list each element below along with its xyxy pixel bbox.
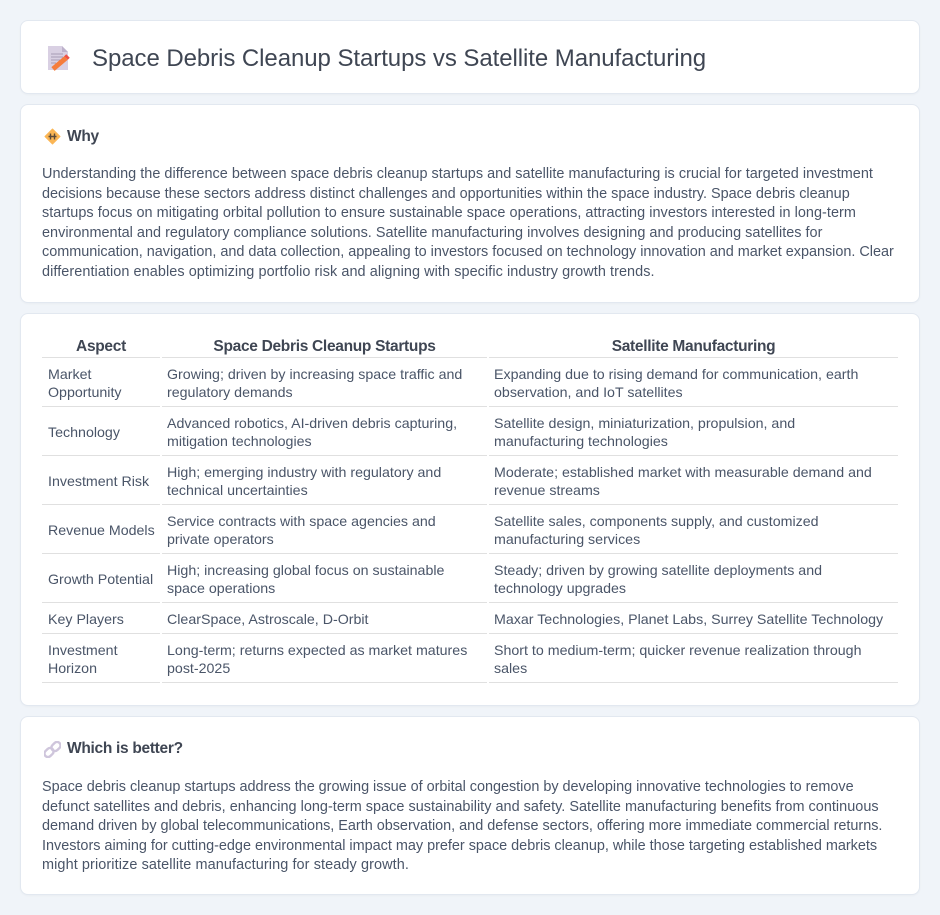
comparison table: Opportunity xyxy=(48,385,122,401)
comparison table: observation, and IoT satellites xyxy=(494,385,683,401)
comparison table: Short to medium-term; quicker revenue realization through xyxy=(494,643,862,659)
comparison table: Growing; driven by increasing space traffic and xyxy=(167,367,462,383)
text block: which is better: demand driven by global telecommunications, Earth observation, and defense sectors, offering more immediate commercial returns. xyxy=(42,818,882,834)
heading: why: Why xyxy=(67,128,99,145)
comparison table xyxy=(42,338,898,683)
comparison table: Expanding due to rising demand for communication, earth xyxy=(494,367,858,383)
comparison table: High; increasing global focus on sustainable xyxy=(167,563,444,579)
comparison table: Horizon xyxy=(48,661,97,677)
comparison table: sales xyxy=(494,661,527,677)
panel: title header xyxy=(20,20,920,94)
comparison table: Technology xyxy=(48,425,120,441)
comparison table: Long-term; returns expected as market matures xyxy=(167,643,467,659)
comparison table: Satellite design, miniaturization, propulsion, and xyxy=(494,416,795,432)
icon: link xyxy=(44,741,61,758)
comparison table: Market xyxy=(48,367,91,383)
title: Space Debris Cleanup Startups vs Satellite Manufacturing xyxy=(92,45,706,72)
comparison table: Investment xyxy=(48,643,118,659)
text block: which is better: Investors aiming for cutting-edge environmental impact may prefer space debris cleanup, while those targeting established markets xyxy=(42,838,877,854)
text block: which is better: defunct satellites and debris, enhancing long-term space sustainability and safety. Satellite manufacturing benefits from continuous xyxy=(42,799,879,815)
text block: why: decisions because these sectors address distinct challenges and opportunities within the space industry. Space debris cleanup xyxy=(42,186,850,202)
text block: why: Understanding the difference between space debris cleanup startups and satellite manufacturing is crucial for targeted investment xyxy=(42,166,873,182)
comparison table: Service contracts with space agencies and xyxy=(167,514,436,530)
text block: which is better: might prioritize satellite manufacturing for steady growth. xyxy=(42,857,409,873)
comparison table: Growth Potential xyxy=(48,572,153,588)
comparison table: manufacturing technologies xyxy=(494,434,668,450)
comparison table: space operations xyxy=(167,581,275,597)
comparison table: regulatory demands xyxy=(167,385,293,401)
icon: document with pencil xyxy=(48,46,70,71)
comparison table: ClearSpace, Astroscale, D-Orbit xyxy=(167,612,369,628)
comparison table: Key Players xyxy=(48,612,124,628)
text block: why: startups focus on mitigating orbital pollution to ensure sustainable space operations, attracting investors interested in long-term xyxy=(42,205,856,221)
comparison table: technical uncertainties xyxy=(167,483,308,499)
text block: why: communication, navigation, and data collection, appealing to investors focused on technology innovation and market expansion. Clear xyxy=(42,244,894,260)
panel: which is better xyxy=(20,716,920,895)
icon: warning diamond xyxy=(44,128,60,144)
comparison table: Aspect xyxy=(76,338,126,355)
comparison table: private operators xyxy=(167,532,274,548)
comparison table: Advanced robotics, AI-driven debris capturing, xyxy=(167,416,457,432)
comparison table: Steady; driven by growing satellite deployments and xyxy=(494,563,822,579)
panel: why xyxy=(20,104,920,303)
text block: which is better: Space debris cleanup startups address the growing issue of orbital congestion by developing innovative technologies to remove xyxy=(42,779,854,795)
comparison table: technology upgrades xyxy=(494,581,626,597)
comparison table: mitigation technologies xyxy=(167,434,312,450)
comparison table: Space Debris Cleanup Startups xyxy=(213,338,436,355)
comparison table: Satellite sales, components supply, and customized xyxy=(494,514,819,530)
heading: which is better: Which is better? xyxy=(67,740,183,757)
comparison table: post-2025 xyxy=(167,661,230,677)
comparison table: Investment Risk xyxy=(48,474,149,490)
comparison table: Maxar Technologies, Planet Labs, Surrey Satellite Technology xyxy=(494,612,883,628)
comparison table: Revenue Models xyxy=(48,523,155,539)
comparison table: Satellite Manufacturing xyxy=(612,338,775,355)
text block: why: differentiation enables optimizing portfolio risk and aligning with specific industry growth trends. xyxy=(42,264,655,280)
panel: comparison table xyxy=(20,313,920,706)
comparison table: manufacturing services xyxy=(494,532,640,548)
text block: why xyxy=(42,166,894,280)
comparison table: Moderate; established market with measurable demand and xyxy=(494,465,872,481)
comparison table: High; emerging industry with regulatory and xyxy=(167,465,441,481)
text block: why: environmental and regulatory compliance solutions. Satellite manufacturing involves designing and producing satellites for xyxy=(42,225,822,241)
text block: which is better xyxy=(42,779,882,873)
comparison table: revenue streams xyxy=(494,483,600,499)
